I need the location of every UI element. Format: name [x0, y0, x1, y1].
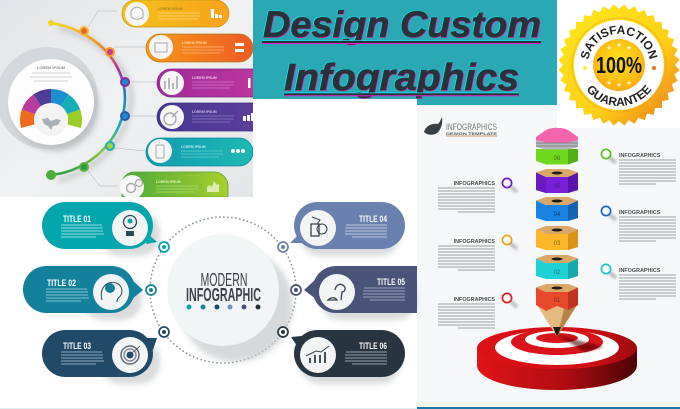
pill shadows — [82, 212, 417, 384]
center disc — [167, 234, 293, 362]
panel: curved timeline infographic — [0, 0, 267, 199]
text block left 3 — [438, 297, 495, 328]
pill 2 — [146, 34, 253, 62]
segment 02 — [536, 255, 578, 279]
connector arrows — [88, 11, 156, 186]
badge disc — [593, 39, 645, 91]
title line 2: Infographics — [284, 57, 519, 99]
badge top text: SATISFACTION — [581, 26, 658, 59]
bullets — [502, 149, 611, 303]
text block left 1 — [438, 181, 495, 212]
badge stars: ★ — [616, 41, 622, 49]
title 05 — [304, 266, 417, 313]
panel: modern infographic — [0, 197, 417, 409]
segment 01: 01 — [554, 298, 561, 304]
title line 1: Design Custom — [264, 5, 542, 46]
pill 1: LOREM IPSUM — [158, 7, 183, 11]
title 06: TITLE 06 — [359, 341, 387, 351]
segment 06 eraser: 06 — [554, 156, 561, 162]
text block left 2: INFOGRAPHICS — [454, 239, 495, 245]
center heading: MODERN — [200, 270, 248, 290]
title 01: TITLE 01 — [63, 214, 91, 224]
pill 6: LOREM IPSUM — [156, 180, 181, 184]
curve shadow — [58, 28, 131, 180]
dotted ring — [150, 217, 296, 363]
text block right 2: INFOGRAPHICS — [619, 210, 661, 216]
pill 4 — [157, 103, 267, 131]
pill 6 — [120, 172, 228, 199]
pill 3: LOREM IPSUM — [192, 76, 217, 80]
segment 04 — [536, 197, 578, 221]
text block right 3: INFOGRAPHICS — [619, 268, 661, 274]
timeline nodes — [46, 20, 130, 180]
segment 02: 02 — [554, 270, 561, 276]
pill 2: LOREM IPSUM — [182, 41, 207, 45]
badge stars: ★ — [606, 44, 612, 52]
title line 2: Infographics — [283, 56, 518, 98]
segment 04: 04 — [554, 212, 561, 218]
pill 1 — [122, 0, 229, 27]
text block right 3 — [619, 268, 676, 299]
text block right 1: INFOGRAPHICS — [619, 153, 661, 159]
title 05: TITLE 05 — [377, 277, 405, 287]
text block right 1 — [619, 153, 676, 184]
title 06 — [291, 330, 405, 377]
logo — [424, 117, 497, 136]
pencil — [536, 128, 578, 337]
title line 2: Infographics — [285, 58, 520, 100]
text block left 1: INFOGRAPHICS — [454, 181, 495, 187]
segment 05: 05 — [554, 184, 561, 190]
text block left 3: INFOGRAPHICS — [454, 297, 495, 303]
central disc — [0, 47, 99, 151]
satisfaction badge — [557, 4, 680, 128]
segment 03: 03 — [554, 241, 561, 247]
panel: pencil target infographic — [417, 105, 680, 409]
badge side dots — [583, 66, 656, 70]
badge stars: ★ — [606, 79, 612, 87]
pill 5 — [146, 138, 253, 166]
ring nodes — [146, 242, 301, 337]
badge bottom text: GUARANTEE — [588, 84, 652, 106]
badge stars — [606, 41, 632, 89]
segment 06 eraser — [536, 128, 578, 164]
segment 03 — [536, 226, 578, 250]
timeline curve — [51, 23, 125, 175]
center dots — [186, 304, 260, 310]
bullet shadows — [509, 156, 616, 307]
pill 3 — [157, 69, 267, 97]
title line 1: Design Custom — [262, 3, 540, 44]
title 03: TITLE 03 — [63, 341, 91, 351]
title 03 — [42, 330, 157, 377]
target — [477, 327, 637, 390]
text block left 2 — [438, 239, 495, 270]
segment 05 — [536, 169, 578, 193]
center disc: INFOGRAPHIC — [186, 285, 261, 305]
title 04: TITLE 04 — [359, 214, 387, 224]
title 04 — [290, 202, 405, 249]
pill 5: LOREM IPSUM — [181, 145, 206, 149]
logo: DESIGN TEMPLATE — [446, 131, 497, 136]
badge stars: ★ — [626, 79, 632, 87]
text block right 2 — [619, 210, 676, 241]
title banner — [253, 0, 557, 105]
badge white ring — [574, 20, 664, 110]
title line 1: Design Custom — [263, 4, 541, 45]
ring node centres — [149, 245, 298, 334]
badge stars: ★ — [626, 44, 632, 52]
segment 01 — [536, 284, 578, 311]
logo: INFOGRAPHICS — [446, 122, 497, 133]
title 01 — [42, 202, 157, 249]
badge starburst — [556, 2, 680, 128]
pencil tip — [537, 305, 577, 337]
badge 100 percent: 100% — [596, 52, 642, 78]
pill 4: LOREM IPSUM — [192, 110, 217, 114]
central disc: LOREM IPSUM — [37, 65, 66, 70]
title 02: TITLE 02 — [47, 278, 76, 288]
title 02 — [23, 266, 143, 313]
badge stars: ★ — [616, 81, 622, 89]
